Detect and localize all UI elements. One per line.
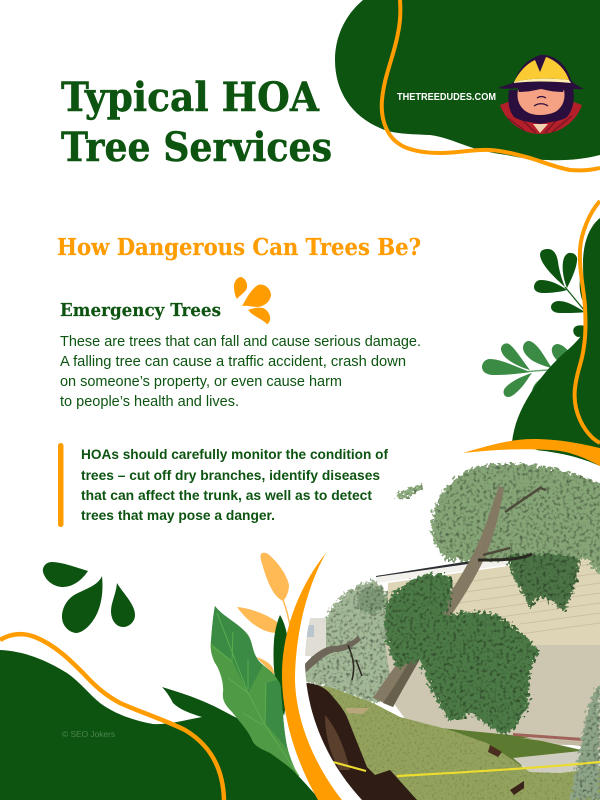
logo mascot bbox=[498, 55, 584, 134]
callout text: that can affect the trunk, as well as to detect bbox=[81, 488, 372, 504]
photo top canopy bbox=[395, 463, 600, 612]
body paragraph: These are trees that can fall and cause serious damage. bbox=[60, 334, 421, 350]
title bbox=[61, 74, 332, 171]
photo roof bbox=[376, 561, 511, 583]
photo building siding bbox=[388, 553, 600, 646]
callout text: trees – cut off dry branches, identify diseases bbox=[81, 468, 380, 484]
top right orange line bbox=[382, 0, 600, 170]
droplets bottom left bbox=[43, 562, 135, 633]
photo hanging foliage bbox=[385, 573, 540, 735]
photo background trees bbox=[300, 580, 395, 702]
copyright note: © SEO Jokers bbox=[62, 730, 115, 739]
body paragraph: to people’s health and lives. bbox=[60, 394, 239, 410]
top orange crescent bbox=[463, 439, 600, 466]
dark green leaf bbox=[273, 615, 290, 716]
photo trunk bbox=[373, 486, 504, 707]
callout text: HOAs should carefully monitor the condition of bbox=[81, 447, 388, 463]
photo soil roots bbox=[300, 680, 417, 800]
subtitle: How Dangerous Can Trees Be? bbox=[57, 233, 421, 261]
right sprig: dark leaves bbox=[534, 249, 586, 337]
photo right shrub bbox=[570, 685, 600, 800]
right orange line bbox=[575, 201, 600, 443]
right green blob bbox=[512, 218, 600, 470]
callout bar bbox=[58, 443, 64, 527]
title: Typical HOA bbox=[61, 74, 320, 121]
photo left branch bbox=[303, 636, 361, 672]
top right green blob bbox=[335, 0, 600, 160]
white band under crescent bbox=[470, 449, 600, 490]
photo back lawn bbox=[442, 728, 580, 766]
left orange crescent bbox=[282, 553, 342, 800]
title: Tree Services bbox=[61, 124, 332, 171]
bottom left orange line bbox=[0, 634, 224, 800]
photo building lower wall bbox=[385, 645, 600, 745]
callout text bbox=[81, 447, 388, 524]
photo: fallen tree bbox=[300, 460, 600, 800]
callout text: trees that may pose a danger. bbox=[81, 508, 275, 524]
bottom left green blob bbox=[0, 650, 320, 800]
photo sky bbox=[300, 460, 600, 800]
photo caution tape bbox=[333, 762, 600, 776]
photo left house bbox=[305, 618, 326, 656]
body paragraph: on someone’s property, or even cause harm bbox=[60, 374, 342, 390]
photo grass mound bbox=[307, 683, 600, 800]
icon: orange droplets bbox=[234, 277, 271, 324]
section heading: emergency trees: Emergency Trees bbox=[60, 300, 221, 321]
right sprig: light leaves bbox=[482, 341, 571, 397]
body paragraph bbox=[60, 334, 421, 410]
body paragraph: A falling tree can cause a traffic accident, crash down bbox=[60, 354, 406, 370]
light orange leaves bbox=[237, 553, 291, 675]
big green leaf bbox=[211, 606, 299, 776]
logo text: THETREEDUDES.COM bbox=[397, 91, 496, 103]
